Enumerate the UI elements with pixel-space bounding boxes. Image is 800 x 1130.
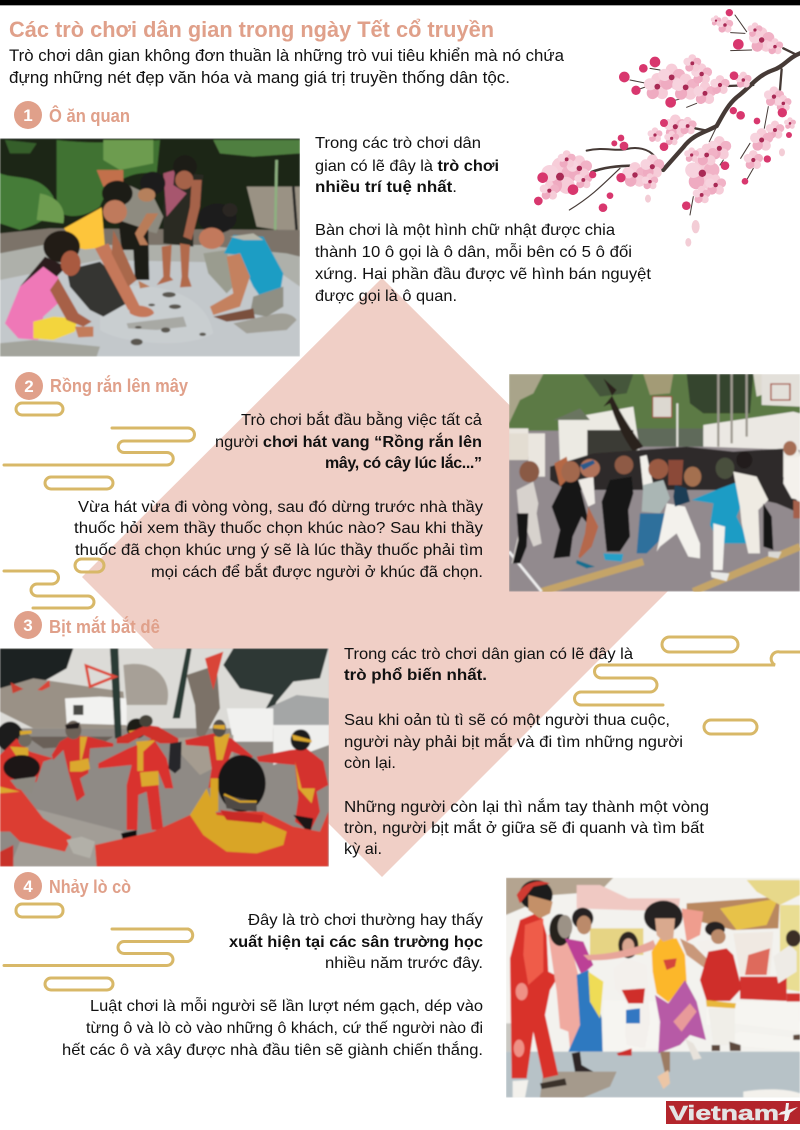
section 1 text: thành 10 ô gọi là ô dân, mỗi bên có 5 ô đối — [315, 242, 632, 261]
section 2 heading — [15, 372, 188, 400]
section 2 heading: 2 — [24, 377, 34, 396]
kid 7 blue ao dai — [692, 482, 750, 543]
section 3 text: Những người còn lại thì nắm tay thành một vòng — [344, 797, 709, 816]
girl in center — [583, 940, 657, 960]
section 3 text: trò phổ biến nhất. — [344, 666, 487, 684]
right kid — [697, 938, 720, 953]
section 4 text: hết các ô và xây được nhà đầu tiên sẽ giành chiến thắng. — [62, 1040, 483, 1059]
section 4 text: Đây là trò chơi thường hay thấy — [248, 912, 483, 929]
blue girl — [203, 250, 233, 293]
section 4 text: Luật chơi là mỗi người sẽ lần lượt ném gạch, dép vào — [90, 996, 483, 1015]
section 2 text: mọi cách để bắt được người ở khúc đã chọn. — [151, 562, 483, 581]
kid 6 white — [657, 503, 700, 558]
kid 5 — [642, 480, 670, 513]
photo 2: children playing dragon snake game — [509, 374, 800, 592]
background kid center — [613, 958, 650, 1048]
yellow boy — [67, 262, 132, 317]
kid 8 white — [733, 472, 768, 553]
right figure 2 — [257, 748, 328, 832]
section 2 text: mây, có cây lúc lắc...” — [325, 453, 482, 472]
decorative clouds: section 3 — [575, 637, 800, 734]
back girl — [163, 172, 203, 247]
section 4 text: từng ô và lò cò vào những ô khách, cứ thế người nào đi — [86, 1020, 483, 1037]
pink girl — [5, 267, 60, 340]
section 4 heading: 4 — [23, 877, 33, 896]
kid 1 — [512, 482, 542, 563]
section 1 heading: Ô ăn quan — [49, 105, 130, 126]
section 3 heading: Bịt mắt bắt dê — [49, 616, 160, 637]
section 4 text — [62, 912, 483, 1059]
back boy — [120, 185, 163, 233]
foreground big figure — [95, 812, 328, 867]
section 1 text: Bàn chơi là một hình chữ nhật được chia — [315, 222, 615, 239]
photo 3: children playing blind man's goat — [0, 648, 329, 867]
back figure — [117, 725, 178, 743]
right figure 1 — [185, 733, 253, 788]
decorative clouds: section 2 — [4, 403, 195, 608]
crowd — [550, 447, 800, 513]
section 2 text — [74, 410, 483, 581]
ground stripes — [542, 547, 800, 592]
figure 2 — [52, 735, 113, 802]
section 2 text: thuốc hỏi xem thầy thuốc chọn khúc nào? Sau khi thầy — [74, 520, 483, 537]
section 3 heading — [14, 611, 160, 639]
girls group — [548, 928, 580, 1052]
left dark figure — [0, 722, 23, 752]
decorative clouds: section 4 — [4, 904, 193, 990]
section 3 text: Sau khi oản tù tì sẽ có một người thua cuộc, — [344, 712, 670, 729]
section 3 text — [344, 646, 709, 858]
boy in red left — [510, 912, 558, 1078]
section 2 text: người chơi hát vang “Rồng rắn lên — [215, 432, 482, 451]
foreground left figure — [0, 788, 72, 852]
section 2 text: Vừa hát vừa đi vòng vòng, sau đó dừng trước nhà thầy — [78, 499, 483, 516]
kid 4 black — [602, 477, 633, 552]
section 2 text: Trò chơi bắt đầu bằng việc tất cả — [241, 410, 482, 429]
section 4 heading: Nhảy lò cò — [49, 877, 131, 897]
photo 4: children hopscotch — [506, 878, 800, 1098]
far right kid — [773, 945, 797, 983]
section 3 text: tròn, người bịt mắt ở giữa sẽ đi quanh và tìm bất — [344, 818, 705, 837]
section 1 heading: 1 — [23, 106, 33, 125]
section 3 text: kỳ ai. — [344, 841, 382, 858]
section 3 text: Trong các trò chơi dân gian có lẽ đây là — [344, 646, 633, 663]
section 1 text: gian có lẽ đây là trò chơi — [315, 158, 499, 175]
intro text: Trò chơi dân gian không đơn thuần là những trò vui tiêu khiển mà nó chứa — [9, 46, 565, 65]
section 1 text: Trong các trò chơi dân — [315, 135, 481, 152]
section 2 text: thuốc đã chọn khúc ưng ý sẽ là lúc thầy thuốc phải tìm — [75, 542, 483, 559]
section 4 text: nhiều năm trước đây. — [325, 955, 483, 972]
illustration: cherry blossom branch — [534, 9, 800, 247]
logo: VietnamPlus: Vietnam — [669, 1103, 779, 1125]
section 1 text: nhiều trí tuệ nhất . — [315, 179, 457, 196]
section 1 text: xứng. Hai phần đầu được vẽ hình bán nguyệt — [315, 266, 652, 283]
section 4 heading — [14, 872, 131, 900]
intro text — [9, 46, 565, 87]
title: Các trò chơi dân gian trong ngày Tết cổ truyền — [9, 17, 494, 42]
section 1 text: được gọi là ô quan. — [315, 288, 457, 305]
section 1 heading — [14, 101, 130, 129]
intro text: đựng những nét đẹp văn hóa và mang giá trị truyền thống dân tộc. — [9, 68, 510, 87]
section 3 text: người này phải bịt mắt và đi tìm những người — [344, 732, 683, 751]
logo: VietnamPlus — [666, 1101, 800, 1125]
kid 2 black — [552, 480, 590, 558]
top black bar — [0, 0, 800, 6]
pink background diamond — [82, 278, 682, 877]
section 2 heading: Rồng rắn lên mây — [50, 375, 188, 396]
section 3 heading: 3 — [23, 616, 33, 635]
kid right — [782, 476, 796, 500]
center figure — [98, 738, 173, 830]
photo 1: children playing o an quan — [0, 138, 300, 357]
section 1 text — [315, 135, 652, 305]
section 3 text: còn lại. — [344, 755, 396, 772]
kid 3 — [578, 477, 595, 507]
section 4 text: xuất hiện tại các sân trường học — [229, 934, 483, 951]
